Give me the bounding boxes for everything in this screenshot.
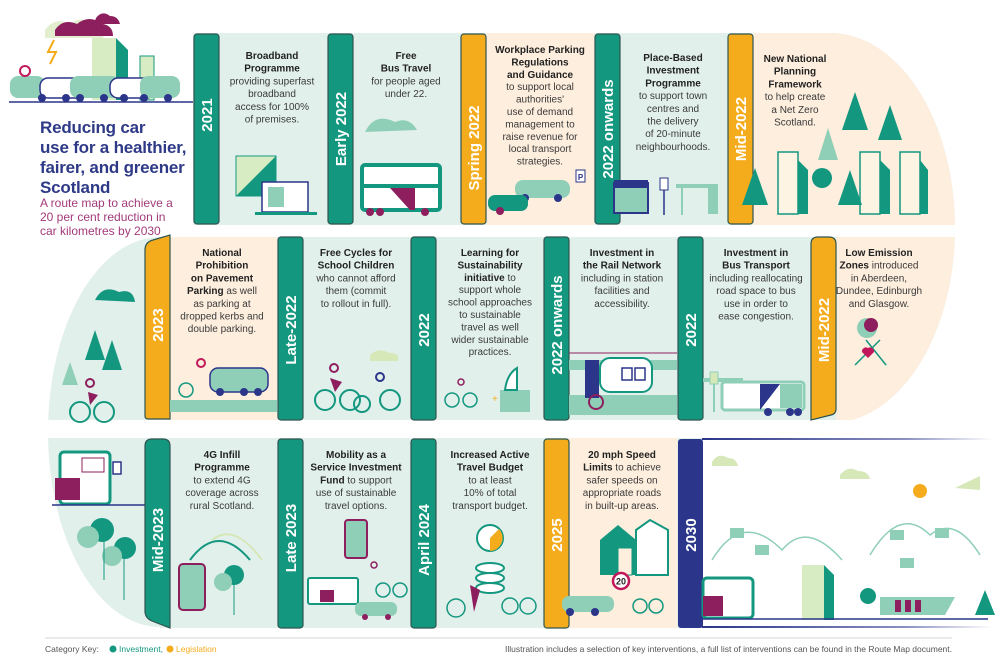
panel: 2021 broadband: 2021 xyxy=(199,98,216,132)
panel: spring 2022 workplace parking: management to xyxy=(505,119,575,130)
panel: late-2022 free cycles: Free Cycles for xyxy=(320,248,392,259)
panel: 2022 onwards place-based: the delivery xyxy=(647,116,699,128)
panel: 2022 onwards rail: the Rail Network xyxy=(583,261,662,272)
panel: late-2022 free cycles: Late-2022 xyxy=(283,295,300,365)
panel: 2023 pavement parking: on Pavement xyxy=(191,273,254,284)
panel: 2023 pavement parking: National xyxy=(202,248,242,259)
panel: 2022 learning for sustainability: 2022 xyxy=(416,313,433,347)
panel: mid-2022 planning framework: Framework xyxy=(768,79,822,90)
panel: mid-2022 planning framework: to help create xyxy=(765,92,826,103)
panel: mid-2022 low emission zones: Low Emission xyxy=(845,248,913,259)
panel: early 2022 bus: under 22. xyxy=(385,89,427,100)
panel: 2022 onwards place-based: centres and xyxy=(647,104,699,115)
panel: mid-2023 4G infill: Programme xyxy=(194,463,250,474)
panel: late 2023 mobility as a service xyxy=(278,439,407,628)
left cap row 2: cyclist and trees xyxy=(62,289,135,422)
panel: 2022 onwards rail: accessibility. xyxy=(594,299,650,310)
panel: late 2023 mobility as a service: Late 2023 xyxy=(283,504,300,572)
panel: 2022 onwards rail: Investment in xyxy=(590,248,654,259)
panel: late-2022 free cycles: School Children xyxy=(318,261,394,272)
panel: 2022 onwards place-based: to support town xyxy=(639,91,707,102)
panel: mid-2022 planning framework: New National xyxy=(764,54,827,65)
panel: 2021 broadband: of premises. xyxy=(245,114,299,126)
header illustration: traffic jam xyxy=(9,13,193,102)
panel: 2022 bus transport: use in order to xyxy=(724,299,788,310)
panel: mid-2023 4G infill: rural Scotland. xyxy=(190,501,254,512)
footnote: Illustration includes a selection of key interventions, a full list of interventions can be found in the Route Map document. xyxy=(505,644,952,654)
panel: 2023 pavement parking: double parking. xyxy=(188,324,256,335)
category key xyxy=(45,644,217,654)
left cap row 3: bus and trees xyxy=(52,452,145,600)
panel: 2023 pavement parking: dropped kerbs and xyxy=(180,312,264,322)
panel: early 2022 bus xyxy=(328,34,441,224)
icon: coin stack xyxy=(447,525,536,617)
panel: early 2022 bus: Bus Travel xyxy=(381,64,432,75)
panel: early 2022 bus: for people aged xyxy=(371,76,441,87)
panel: late 2023 mobility as a service: Mobility as a xyxy=(326,450,386,461)
panel: 2022 bus transport: 2022 xyxy=(683,313,700,347)
icon: shop and bus stop xyxy=(614,178,718,215)
icon: head and heart xyxy=(855,318,886,365)
panel: 2022 onwards place-based: Programme xyxy=(645,78,701,89)
panel: april 2024 active travel budget: Travel Budget xyxy=(457,463,524,474)
panel: 2022 bus transport: Investment in xyxy=(724,248,788,259)
icon: devices xyxy=(236,156,317,215)
panel: 2021 broadband: broadband xyxy=(248,89,296,100)
title block: Reducing car xyxy=(40,118,146,137)
panel: 2022 onwards rail: including in station xyxy=(581,273,663,284)
footer divider xyxy=(45,637,952,639)
panel: 2022 learning for sustainability: wider sustainable xyxy=(450,335,529,346)
panel: mid-2022 planning framework xyxy=(728,34,928,224)
panel: 2023 pavement parking: 2023 xyxy=(150,308,167,342)
title block: car kilometres by 2030 xyxy=(40,224,161,238)
panel: late-2022 free cycles xyxy=(278,237,400,420)
panel: mid-2022 low emission zones xyxy=(811,237,922,420)
icon: bicycles xyxy=(315,350,400,412)
panel: 2022 learning for sustainability: Learning for xyxy=(461,248,519,259)
panel: spring 2022 workplace parking: Regulations xyxy=(511,57,569,68)
panel: spring 2022 workplace parking: use of demand xyxy=(507,107,573,118)
panel: early 2022 bus: Early 2022 xyxy=(333,92,350,166)
panel: 2021 broadband: Broadband xyxy=(246,51,298,62)
panel: 2025 20 mph: in built-up areas. xyxy=(585,501,659,512)
panel: mid-2022 planning framework: Scotland. xyxy=(774,118,816,128)
panel: mid-2022 planning framework: Mid-2022 xyxy=(733,97,750,161)
panel: 2022 learning for sustainability: practices. xyxy=(469,347,511,358)
panel: spring 2022 workplace parking: strategies. xyxy=(517,157,563,168)
panel: mid-2023 4G infill: 4G Infill xyxy=(204,450,241,461)
title block: 20 per cent reduction in xyxy=(40,210,165,224)
panel: 2023 pavement parking: Parking as well xyxy=(187,286,257,297)
panel: 2022 learning for sustainability: school approaches xyxy=(448,298,532,309)
panel: april 2024 active travel budget: Increased Active xyxy=(450,450,530,461)
panel: late 2023 mobility as a service: Fund to support xyxy=(320,475,392,486)
panel: 2021 broadband: access for 100% xyxy=(235,102,309,113)
panel: early 2022 bus: Free xyxy=(395,51,417,62)
panel: 2021 broadband: providing superfast xyxy=(230,76,314,87)
panel: 2025 20 mph: 2025 xyxy=(549,518,566,552)
panel: spring 2022 workplace parking: and Guidance xyxy=(507,70,573,81)
icon: phone, bus, bikes, car xyxy=(308,520,407,620)
icon: parked cars xyxy=(488,170,585,215)
icon: train xyxy=(569,353,677,415)
panel: 2021 broadband: Programme xyxy=(244,64,300,75)
panel: spring 2022 workplace parking xyxy=(461,34,585,224)
panel: mid-2023 4G infill: Mid-2023 xyxy=(150,508,167,572)
panel: 2021 broadband xyxy=(194,34,317,224)
icon: thumbs up xyxy=(445,368,530,412)
panel: mid-2022 low emission zones: and Glasgow. xyxy=(849,299,909,310)
panel: 2022 onwards place-based xyxy=(595,34,718,224)
icon: trees and flats xyxy=(742,92,928,214)
panel: mid-2023 4G infill: to extend 4G xyxy=(193,475,251,486)
panel: 2022 onwards place-based: 2022 onwards xyxy=(600,79,617,179)
panel: spring 2022 workplace parking: to support local xyxy=(506,82,574,93)
icon: phone and hills xyxy=(179,534,262,615)
panel: 2022 bus transport: Bus Transport xyxy=(722,261,791,272)
panel: 2023 pavement parking: Prohibition xyxy=(196,261,248,272)
panel: late 2023 mobility as a service: use of sustainable xyxy=(316,488,397,499)
category key: Investment, xyxy=(119,644,163,654)
panel: 2025 20 mph: 20 mph Speed xyxy=(588,450,656,461)
panel: 2025 20 mph: appropriate roads xyxy=(583,488,661,499)
panel: mid-2022 low emission zones: Dundee, Edinburgh xyxy=(836,286,922,297)
panel: late 2023 mobility as a service: Service Investment xyxy=(310,463,402,474)
panel: 2022 onwards rail: facilities and xyxy=(594,286,650,297)
icon: bus xyxy=(362,119,440,216)
title block: use for a healthier, xyxy=(40,138,186,157)
title block: Scotland xyxy=(40,178,110,197)
panel: mid-2023 4G infill: coverage across xyxy=(185,488,259,499)
panel: mid-2022 low emission zones: Zones introduced xyxy=(840,261,918,272)
panel: 2022 onwards place-based: Place-Based xyxy=(643,53,703,64)
panel: mid-2022 planning framework: Planning xyxy=(774,67,816,78)
panel: spring 2022 workplace parking: authorities' xyxy=(516,95,564,106)
panel: 2022 learning for sustainability: to sustainable xyxy=(459,310,521,321)
panel: 2022 onwards place-based: of 20-minute xyxy=(645,129,701,140)
panel: 2025 20 mph: Limits to achieve xyxy=(583,463,661,474)
panel: 2025 20 mph: safer speeds on xyxy=(586,475,658,486)
panel: 2025 20 mph xyxy=(544,439,668,628)
panel: spring 2022 workplace parking: Workplace Parking xyxy=(495,45,585,56)
panel: 2022 learning for sustainability: support whole xyxy=(459,285,522,296)
illustration: future town xyxy=(703,456,995,620)
icon: houses, sign, car: 20 xyxy=(616,576,626,586)
panel: spring 2022 workplace parking: raise revenue for xyxy=(502,132,578,143)
panel: 2022 learning for sustainability: travel as well xyxy=(461,322,519,333)
panel: late-2022 free cycles: to rollout in full). xyxy=(321,299,391,310)
panel: mid-2023 4G infill xyxy=(145,439,262,628)
panel: 2022 onwards place-based: neighbourhoods. xyxy=(636,142,710,153)
panel: april 2024 active travel budget: transport budget. xyxy=(452,501,528,512)
panel: 2030 vision: 2030 xyxy=(683,518,700,552)
panel: 2022 bus transport: ease congestion. xyxy=(718,312,794,322)
title block xyxy=(40,118,186,238)
panel: 2023 pavement parking xyxy=(145,235,277,419)
panel: april 2024 active travel budget: 10% of total xyxy=(464,488,516,499)
panel: april 2024 active travel budget: April 2024 xyxy=(416,503,433,576)
panel: 2022 bus transport xyxy=(678,237,804,420)
panel: april 2024 active travel budget: to at least xyxy=(468,475,512,486)
panel: 2022 learning for sustainability xyxy=(411,237,532,420)
panel: 2022 bus transport: including reallocating xyxy=(709,273,803,284)
panel: 2022 onwards rail: 2022 onwards xyxy=(549,275,566,375)
panel: 2022 learning for sustainability: initiative to xyxy=(464,273,516,284)
title block: fairer, and greener xyxy=(40,158,185,177)
category key: Category Key: xyxy=(45,644,99,654)
panel: 2030 vision xyxy=(678,439,995,628)
icon: car on pavement xyxy=(170,359,277,412)
panel: late-2022 free cycles: who cannot afford xyxy=(315,273,396,284)
panel: mid-2022 planning framework: a Net Zero xyxy=(771,105,819,116)
title block: A route map to achieve a xyxy=(40,196,173,210)
icon: houses, sign, car xyxy=(562,520,668,616)
panel: 2022 onwards place-based: Investment xyxy=(647,66,700,77)
panel: 2022 bus transport: road space to bus xyxy=(716,286,796,297)
icon: thumbs up: + xyxy=(492,394,498,405)
icon: parked cars: P xyxy=(578,173,584,182)
category key: Legislation xyxy=(176,644,217,654)
panel: 2023 pavement parking: as parking at xyxy=(193,299,251,310)
icon: bus at stop xyxy=(703,372,804,416)
panel: 2022 learning for sustainability: Sustainability xyxy=(457,260,523,271)
panel: spring 2022 workplace parking: local transport xyxy=(509,144,572,155)
panel: spring 2022 workplace parking: Spring 2022 xyxy=(466,105,483,191)
panel: mid-2022 low emission zones: in Aberdeen, xyxy=(851,273,907,284)
panel: late 2023 mobility as a service: travel options. xyxy=(325,501,387,512)
panel: 2022 onwards rail xyxy=(544,237,677,420)
panel: late-2022 free cycles: them (commit xyxy=(326,286,387,297)
panel: mid-2022 low emission zones: Mid-2022 xyxy=(816,298,833,362)
panel: april 2024 active travel budget xyxy=(411,439,536,628)
